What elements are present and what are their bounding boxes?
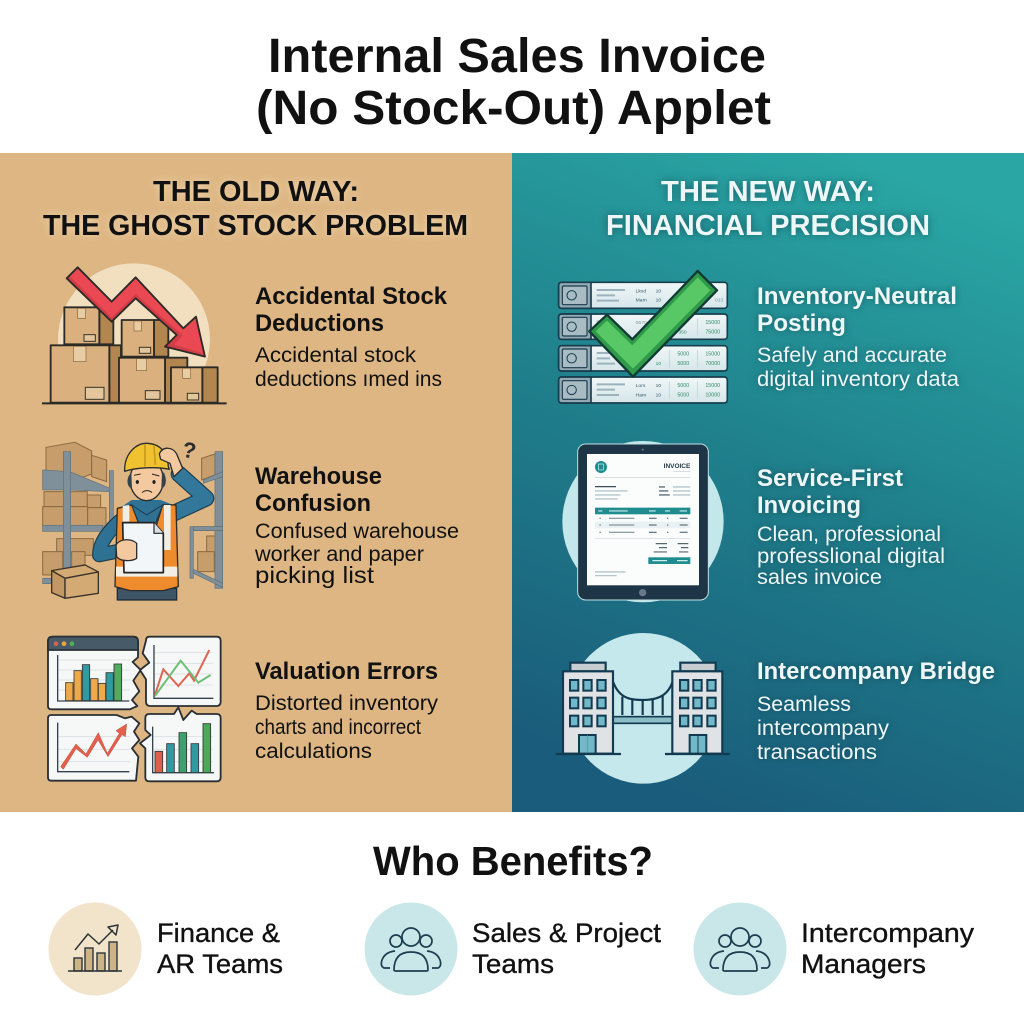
row 1: 013 <box>715 298 724 304</box>
panel: the new way <box>512 153 1024 812</box>
text: accidental stock deductions: Deductions <box>255 310 384 337</box>
paper <box>123 523 163 573</box>
row 4 <box>559 377 727 403</box>
text: service-first invoicing: sales invoice <box>757 565 882 589</box>
benefit: sales and project teams: Teams <box>472 949 554 979</box>
row 4: 5000 <box>677 392 689 398</box>
title: (No Stock-Out) Applet <box>256 82 771 135</box>
row 1 <box>559 282 727 308</box>
benefit: intercompany managers <box>694 902 975 996</box>
text: warehouse confusion: worker and paper <box>254 542 424 566</box>
text: inventory-neutral posting: Safely and accurate <box>757 343 947 367</box>
heading: old way: THE OLD WAY: <box>153 176 359 208</box>
icon: tablet with digital invoice: INVOICE <box>664 463 691 470</box>
text: valuation errors: calculations <box>255 739 372 763</box>
row 1: 10 <box>656 288 661 294</box>
heading: old way <box>43 176 468 242</box>
text: warehouse confusion <box>254 463 459 588</box>
text: service-first invoicing: Service-First <box>757 465 903 492</box>
heading: new way: FINANCIAL PRECISION <box>606 210 930 242</box>
benefit: intercompany managers: Intercompany <box>801 918 975 948</box>
text: warehouse confusion: picking list <box>255 562 375 588</box>
benefit: finance and AR teams: Finance & <box>157 918 280 948</box>
text: valuation errors <box>255 658 438 763</box>
question mark: ? <box>181 437 198 464</box>
worker body <box>117 588 177 600</box>
row 4: 15000 <box>705 383 720 389</box>
icon: people group <box>364 902 458 996</box>
heading: new way: THE NEW WAY: <box>661 176 875 208</box>
row 3: 15000 <box>705 352 720 358</box>
row 3 <box>559 346 727 371</box>
text: accidental stock deductions: Accidental stock <box>255 343 416 367</box>
row 4: Lors <box>636 383 646 389</box>
text: warehouse confusion: Warehouse <box>255 463 382 490</box>
row 3: 5000 <box>677 352 689 358</box>
box on floor <box>52 565 98 598</box>
text: intercompany bridge: Seamless <box>757 692 851 716</box>
text: inventory-neutral posting <box>757 283 959 391</box>
panel: the old way <box>0 153 512 812</box>
benefit: intercompany managers: Managers <box>801 949 926 979</box>
raised arm <box>170 474 206 515</box>
text: inventory-neutral posting: Inventory-Neutral <box>757 283 957 310</box>
row 4: 10000 <box>705 392 720 398</box>
text: intercompany bridge: intercompany <box>757 716 889 740</box>
row 2: 350 <box>678 329 687 335</box>
row 4: Ham <box>636 392 646 398</box>
row 3: 10 <box>656 361 661 367</box>
benefit: sales and project teams: Sales & Project <box>472 918 661 948</box>
icon: people group <box>694 902 786 996</box>
benefit: sales and project teams <box>364 902 661 996</box>
text: warehouse confusion: Confusion <box>255 490 371 517</box>
row 3: 70000 <box>705 361 720 367</box>
icon: broken charts <box>48 637 221 781</box>
row 4: 5000 <box>677 383 689 389</box>
heading: who benefits: Who Benefits? <box>373 838 653 884</box>
text: accidental stock deductions: Accidental Stock <box>255 283 447 310</box>
icon: confused warehouse worker <box>43 437 223 600</box>
row 1: Lkxd <box>636 288 646 294</box>
text: service-first invoicing: Invoicing <box>757 492 861 519</box>
text: service-first invoicing <box>757 465 945 589</box>
text: valuation errors: charts and incorrect <box>255 716 421 739</box>
icon: tablet with digital invoice <box>562 441 724 602</box>
text: valuation errors: Distorted inventory <box>255 691 438 715</box>
lowered arm <box>99 517 125 555</box>
row 4: 10 <box>656 383 661 389</box>
row 1: Mam <box>636 298 647 304</box>
text: service-first invoicing: Clean, professional <box>757 522 941 546</box>
row 2: 15000 <box>705 320 720 326</box>
icon: intercompany bridge <box>556 633 730 784</box>
row 2: 0670 <box>636 320 647 326</box>
benefit: finance and AR teams: AR Teams <box>157 949 283 979</box>
text: accidental stock deductions <box>255 283 447 391</box>
text: intercompany bridge: Intercompany Bridge <box>757 658 995 685</box>
text: service-first invoicing: professlional digital <box>757 544 945 568</box>
icon: ledger rows with green check <box>559 271 727 403</box>
text: inventory-neutral posting: digital inventory data <box>757 367 959 391</box>
heading: old way: THE GHOST STOCK PROBLEM <box>43 210 468 242</box>
head <box>130 459 163 501</box>
check mark <box>589 271 717 377</box>
row 1: 10 <box>656 298 661 304</box>
icon: growth chart <box>48 902 142 996</box>
text: intercompany bridge <box>757 658 995 764</box>
benefit: finance and AR teams <box>48 902 283 996</box>
shelves behind the worker <box>43 442 223 588</box>
text: inventory-neutral posting: Posting <box>757 310 846 337</box>
text: warehouse confusion: Confused warehouse <box>255 519 459 543</box>
text: accidental stock deductions: deductions ımed ins <box>255 367 442 391</box>
text: intercompany bridge: transactions <box>757 740 877 764</box>
row 3: 5000 <box>677 361 689 367</box>
title: Internal Sales Invoice <box>268 30 766 83</box>
text: valuation errors: Valuation Errors <box>255 658 438 685</box>
row 2 <box>559 314 727 339</box>
title <box>256 30 771 135</box>
row 4: 10 <box>656 392 661 398</box>
heading: new way <box>606 176 930 242</box>
icon: falling arrow over cardboard boxes <box>42 263 227 415</box>
row 2: 75000 <box>705 329 720 335</box>
